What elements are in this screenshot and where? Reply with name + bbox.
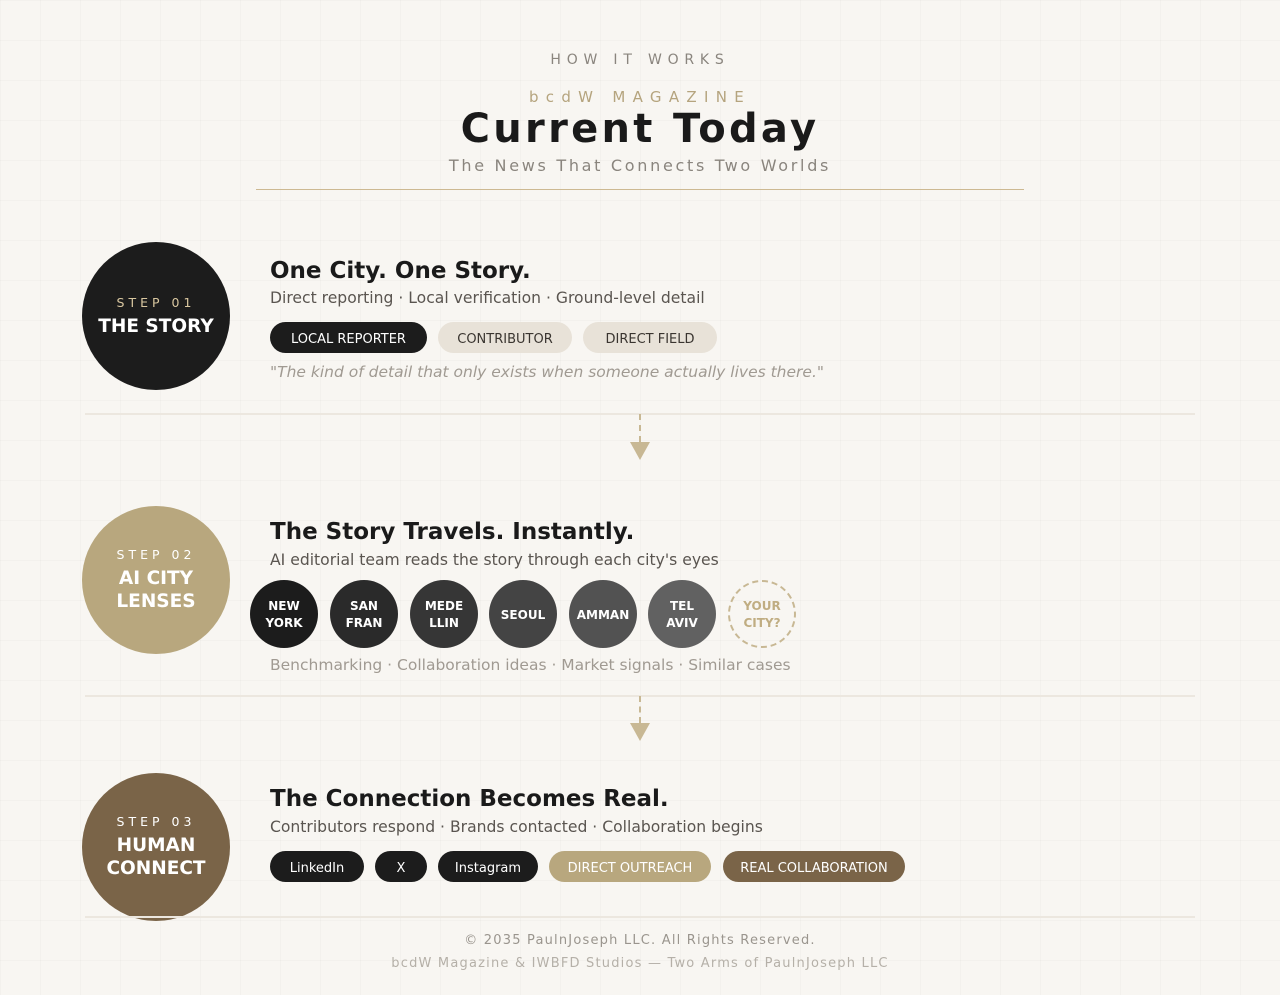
- step 2 subtitle: AI editorial team reads the story through each city's eyes: [270, 551, 719, 569]
- footer credits: bcdW Magazine & IWBFD Studios — Two Arms of PaulnJoseph LLC: [391, 956, 889, 971]
- step 2 circle: AI CITY: [119, 568, 193, 589]
- city lenses: SEOUL: [501, 608, 545, 622]
- brand: bcdW MAGAZINE: [529, 88, 751, 106]
- footer: © 2035 PaulnJoseph LLC. All Rights Reserved.: [464, 933, 816, 948]
- title: Current Today: [461, 106, 819, 152]
- arrow 1: [630, 414, 650, 460]
- eyebrow: how it works: HOW IT WORKS: [550, 52, 730, 68]
- city lenses: TEL: [670, 599, 694, 613]
- step 3 circle: [82, 773, 230, 921]
- step 1 tags: LOCAL REPORTER: [291, 332, 406, 346]
- step 3 subtitle: Contributors respond · Brands contacted · Collaboration begins: [270, 818, 763, 836]
- city lenses: [250, 580, 796, 648]
- step 3 tags: Instagram: [455, 860, 521, 876]
- city lenses: LLIN: [429, 616, 459, 630]
- city lenses: AMMAN: [577, 608, 629, 622]
- step 3 heading: The Connection Becomes Real.: [270, 786, 669, 812]
- tagline: The News That Connects Two Worlds: [449, 156, 831, 175]
- city lenses: SAN: [350, 599, 378, 613]
- step 3 tags: [270, 851, 905, 882]
- step 1 heading: One City. One Story.: [270, 258, 531, 284]
- city lenses: MEDE: [425, 599, 463, 613]
- step 1 subtitle: Direct reporting · Local verification · Ground-level detail: [270, 289, 705, 307]
- step 1 circle: STEP 01: [117, 294, 195, 310]
- step 3 tags: REAL COLLABORATION: [740, 860, 888, 876]
- arrow 2: [630, 696, 650, 741]
- step 2 circle: [82, 506, 230, 654]
- city lenses: YOUR: [743, 599, 781, 613]
- city lenses: YORK: [265, 616, 302, 630]
- city lenses: NEW: [268, 599, 300, 613]
- step 1 quote: "The kind of detail that only exists when someone actually lives there.": [270, 363, 824, 381]
- step 2 circle: STEP 02: [117, 547, 195, 562]
- step 1 circle: THE STORY: [98, 316, 214, 336]
- step 3 tags: LinkedIn: [290, 860, 344, 876]
- city lenses: FRAN: [346, 616, 382, 630]
- city lenses: AVIV: [666, 616, 698, 630]
- step 3 tags: X: [397, 860, 405, 876]
- step 3 circle: STEP 03: [117, 814, 195, 829]
- step 3 circle: CONNECT: [106, 858, 206, 879]
- step 3 circle: HUMAN: [117, 835, 195, 856]
- step 1 tags: [270, 322, 717, 353]
- step 2 outputs: Benchmarking · Collaboration ideas · Market signals · Similar cases: [270, 656, 791, 674]
- step 1 tags: CONTRIBUTOR: [457, 332, 553, 346]
- city lenses: CITY?: [743, 616, 781, 630]
- step 1 tags: DIRECT FIELD: [605, 332, 695, 346]
- step 3 tags: DIRECT OUTREACH: [568, 860, 692, 876]
- step 1 circle: [82, 242, 230, 390]
- step 2 circle: LENSES: [116, 591, 196, 612]
- step 2 heading: The Story Travels. Instantly.: [270, 519, 634, 545]
